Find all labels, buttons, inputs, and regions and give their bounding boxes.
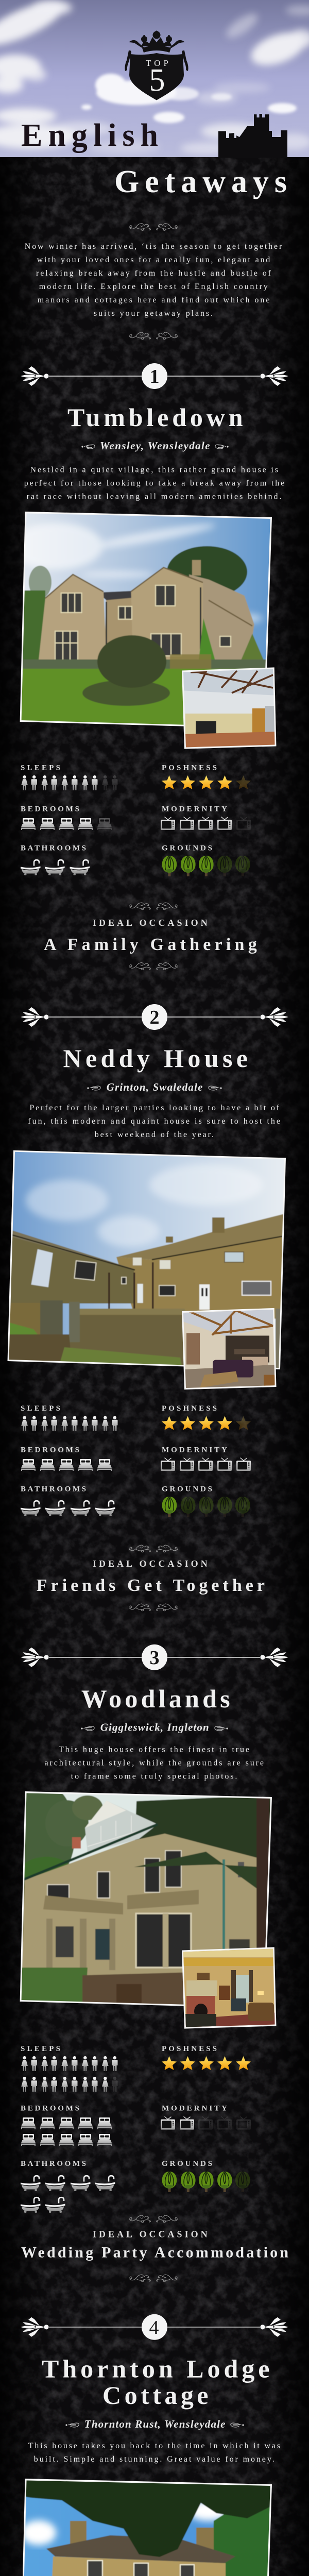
poshness: POSHNESS [162, 764, 217, 772]
modernity [161, 2104, 251, 2130]
sleeps: SLEEPS [21, 764, 60, 772]
number divider 3: 3 [149, 1647, 160, 1669]
number divider 1 [21, 363, 288, 389]
intro text block: manors and cottages here and find out which one [38, 296, 269, 304]
bathrooms [21, 1485, 115, 1516]
grounds: GROUNDS [162, 2160, 212, 2168]
description: fun, this modern and quaint house is sure to host the [28, 1117, 280, 1126]
photo: Woodlands living room inset [180, 1947, 278, 2029]
description: This huge house offers the finest in true [59, 1745, 249, 1754]
ornament [129, 224, 178, 230]
description: rat race without leaving all modern amenities behind. [27, 492, 282, 501]
poshness [162, 764, 251, 789]
crest label: TOP [146, 58, 168, 68]
icon: side scrolls [125, 50, 188, 71]
poshness: POSHNESS [162, 2045, 217, 2053]
number divider 3 [21, 1645, 288, 1670]
heading: Tumbledown [67, 403, 243, 432]
bathrooms [21, 2160, 115, 2213]
description: Nestled in a quiet village, this rather grand house is [30, 465, 278, 474]
stats: Tumbledown [21, 764, 251, 876]
intro text block: modern life. Explore the best of English country [39, 282, 268, 291]
sleeps: SLEEPS [21, 1404, 60, 1413]
intro text block: Now winter has arrived, ‘tis the season to get together [25, 242, 282, 251]
ideal occasion: friends get together: IDEAL OCCASION [93, 1558, 208, 1569]
description: This house takes you back to the time in which it was [28, 2442, 280, 2450]
heading [42, 2354, 270, 2410]
crest: top 5 shield and crown [125, 31, 188, 100]
bathrooms [21, 844, 90, 875]
description: perfect for those looking to take a break away from the [24, 479, 284, 487]
section 3: Woodlands [15, 1645, 288, 2282]
ideal occasion: family gathering: A Family Gathering [44, 935, 257, 954]
number divider 2: 2 [149, 1007, 160, 1028]
ideal occasion: friends get together [37, 1545, 265, 1611]
bedrooms: BEDROOMS [21, 1446, 79, 1454]
number divider 4 [21, 2314, 288, 2340]
crest number: 5 [149, 63, 165, 98]
description: to frame some truly special photos. [71, 1772, 237, 1781]
photo: Thornton Lodge exterior [15, 2475, 278, 2576]
sky background with clouds [0, 0, 309, 158]
icon: crown [129, 31, 185, 53]
stats: Neddy House [21, 1404, 251, 1517]
description: Perfect for the larger parties looking to have a bit of [29, 1104, 280, 1112]
icon: shield [129, 53, 184, 100]
modernity: MODERNITY [162, 1446, 227, 1454]
description: built. Simple and stunning. Great value for money. [34, 2455, 274, 2464]
location: Wensley, Wensleydale [100, 439, 210, 452]
photo: Woodlands exterior [20, 1791, 272, 2006]
poshness [162, 2045, 251, 2070]
modernity: MODERNITY [162, 805, 227, 813]
modernity [161, 1446, 251, 1471]
bathrooms: BATHROOMS [21, 1485, 86, 1493]
grounds: GROUNDS [162, 1485, 212, 1493]
description [24, 465, 284, 501]
number divider 4: 4 [149, 2317, 159, 2338]
ideal occasion: wedding party: IDEAL OCCASION [93, 2229, 208, 2239]
heading: Thornton Lodge [42, 2354, 270, 2383]
grounds [162, 2160, 250, 2192]
grounds [162, 844, 250, 876]
grounds: GROUNDS [162, 844, 212, 852]
title: English: English [21, 118, 158, 153]
photo: Neddy House bedroom inset [180, 1308, 278, 1390]
sleeps [21, 764, 117, 790]
modernity [161, 805, 251, 830]
modernity: MODERNITY [162, 2104, 227, 2112]
title: Getaways: Getaways [114, 164, 287, 199]
bedrooms [21, 1446, 112, 1471]
description [28, 1104, 280, 1139]
sleeps [21, 2045, 117, 2092]
intro text block: relaxing break away from the hustle and bustle of [36, 269, 271, 278]
ideal occasion: family gathering: IDEAL OCCASION [93, 918, 208, 928]
ideal occasion: friends get together: Friends Get Together [37, 1576, 265, 1595]
bathrooms: BATHROOMS [21, 2160, 86, 2168]
ideal occasion: family gathering [44, 903, 257, 970]
section 1: Tumbledown [10, 363, 288, 970]
heading: Cottage [102, 2381, 208, 2410]
bedrooms [21, 805, 112, 830]
section 4: Thornton Lodge Cottage [15, 2314, 288, 2576]
photo: Neddy House exterior [5, 1146, 288, 1373]
ideal occasion: wedding party [21, 2215, 288, 2282]
number divider 2 [21, 1004, 288, 1030]
section 2: Neddy House [5, 1004, 288, 1611]
intro text block: with your loved ones for a really fun, elegant and [37, 256, 270, 264]
description: architectural style, while the grounds are sure [44, 1759, 264, 1767]
description [44, 1745, 264, 1781]
heading: Woodlands [81, 1684, 230, 1713]
bedrooms: BEDROOMS [21, 2104, 79, 2112]
grounds [162, 1485, 250, 1517]
photo: Tumbledown house exterior [10, 507, 278, 732]
description: best weekend of the year. [95, 1130, 214, 1139]
heading: Neddy House [63, 1044, 248, 1073]
sleeps [21, 1404, 117, 1431]
description [28, 2442, 280, 2464]
bathrooms: BATHROOMS [21, 844, 86, 852]
location: Thornton Rust, Wensleydale [84, 2418, 225, 2430]
intro text block [25, 242, 282, 318]
sleeps: SLEEPS [21, 2045, 60, 2053]
poshness [162, 1404, 251, 1430]
location: Giggleswick, Ingleton [100, 1721, 209, 1734]
stats: Woodlands [21, 2045, 251, 2213]
location: Grinton, Swaledale [107, 1081, 202, 1093]
poshness: POSHNESS [162, 1404, 217, 1413]
icon: castle silhouette [218, 114, 287, 158]
ideal occasion: wedding party: Wedding Party Accommodation [21, 2244, 288, 2261]
photo: Tumbledown kitchen inset [180, 667, 278, 750]
bedrooms [21, 2104, 112, 2146]
bedrooms: BEDROOMS [21, 805, 79, 813]
ornament [129, 332, 178, 340]
intro text block: suits your getaway plans. [94, 309, 213, 318]
number divider 1: 1 [149, 366, 160, 387]
